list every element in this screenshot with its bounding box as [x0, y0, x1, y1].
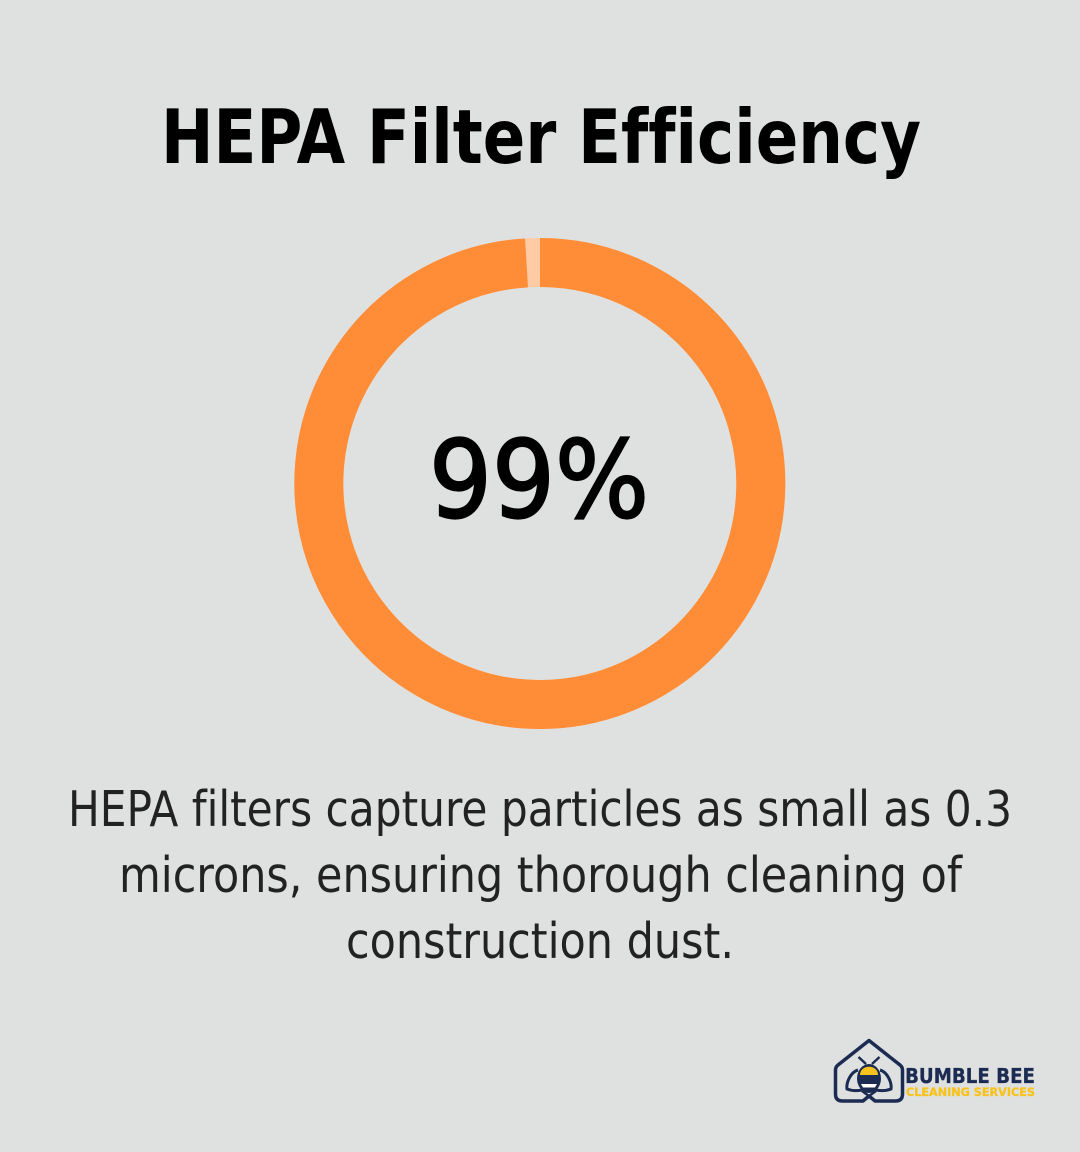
donut segment: 99%: [319, 262, 761, 704]
donut chart: 99%: [319, 262, 761, 704]
title: HEPA Filter Efficiency: [161, 93, 921, 181]
logo name: BUMBLE BEE: [905, 1064, 1035, 1088]
description text: microns, ensuring thorough cleaning of: [119, 847, 964, 904]
donut value: 99%: [429, 419, 649, 543]
logo: Bumble Bee Cleaning Services: [836, 1040, 1035, 1101]
description text: [68, 781, 1012, 970]
description text: construction dust.: [346, 913, 734, 970]
donut segment: remaining 1%: [319, 262, 761, 704]
logo tagline: CLEANING SERVICES: [906, 1085, 1035, 1099]
icon: bee in house: [836, 1040, 902, 1101]
